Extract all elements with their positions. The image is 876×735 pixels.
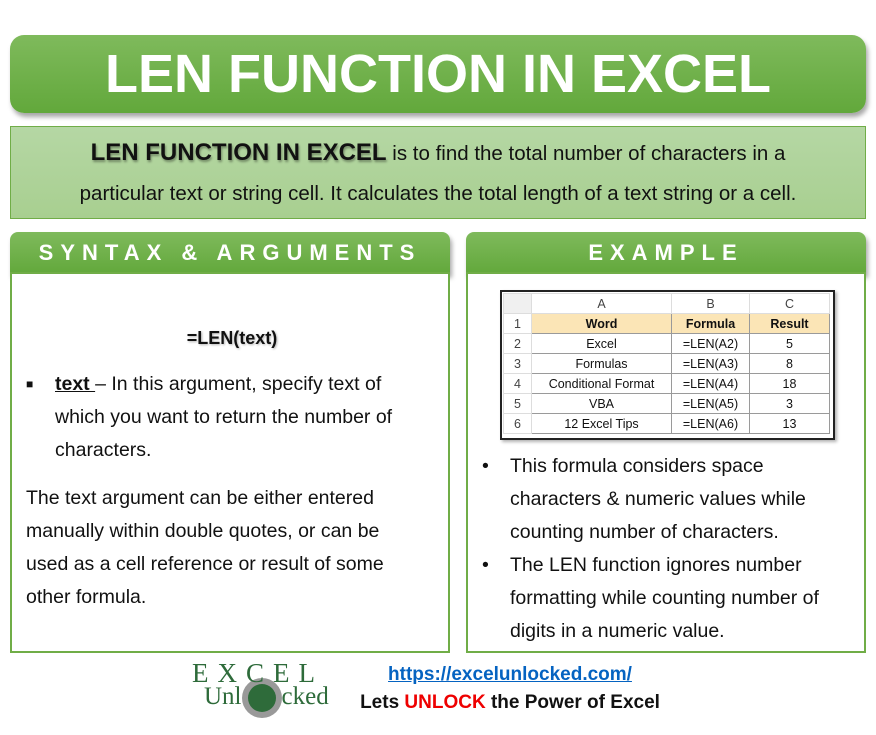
intro box: particular text or string cell. It calculates the total length of a text string or a cell. bbox=[80, 182, 796, 205]
excel table: Conditional Format bbox=[549, 376, 654, 390]
excel table: Result bbox=[770, 316, 809, 330]
excel table: 8 bbox=[786, 356, 793, 370]
excel table bbox=[500, 290, 835, 440]
excel table: =LEN(A3) bbox=[683, 356, 738, 370]
excel table: 5 bbox=[786, 336, 793, 350]
excel table: 5 bbox=[514, 396, 521, 410]
intro box bbox=[10, 126, 866, 219]
logo: EXCEL bbox=[192, 658, 324, 688]
excel table: Formula bbox=[686, 316, 735, 330]
excel table: VBA bbox=[589, 396, 614, 410]
header: example bbox=[466, 232, 866, 274]
excel table: 1 bbox=[514, 316, 521, 330]
syntax formula: =LEN(text) bbox=[187, 328, 277, 348]
excel table: 3 bbox=[514, 356, 521, 370]
excel table: 18 bbox=[783, 376, 796, 390]
excel table: 2 bbox=[514, 336, 521, 350]
excel table: 3 bbox=[786, 396, 793, 410]
excel table: =LEN(A4) bbox=[683, 376, 738, 390]
excel table: 6 bbox=[514, 416, 521, 430]
bullet: text argument: text – In this argument, specify text of which you want to return the number of characters. bbox=[55, 373, 392, 461]
excel table: A bbox=[597, 296, 606, 310]
header: syntax & arguments bbox=[10, 232, 450, 274]
excel table: Word bbox=[586, 316, 617, 330]
paragraph: The text argument can be either entered manually within double quotes, or can be used as a cell reference or result of some other formula. bbox=[26, 487, 384, 608]
excel table: 12 Excel Tips bbox=[564, 416, 639, 430]
title bbox=[10, 35, 866, 113]
logo: Unl cked bbox=[204, 683, 329, 710]
bullets bbox=[482, 455, 819, 642]
footer link: https://excelunlocked.com/ bbox=[388, 664, 632, 685]
excel table: 13 bbox=[783, 416, 796, 430]
panel: example bbox=[466, 272, 866, 653]
bullets: • bbox=[482, 554, 489, 576]
bullet: text argument: ■ bbox=[26, 377, 33, 391]
panel: syntax bbox=[10, 272, 450, 653]
tagline: Lets UNLOCK the Power of Excel bbox=[360, 692, 660, 713]
header: example: EXAMPLE bbox=[588, 240, 744, 265]
logo bbox=[192, 658, 329, 718]
bullets: • bbox=[482, 455, 489, 477]
excel table: =LEN(A5) bbox=[683, 396, 738, 410]
title: LEN FUNCTION IN EXCEL bbox=[105, 44, 771, 104]
excel table: =LEN(A6) bbox=[683, 416, 738, 430]
excel table: 4 bbox=[514, 376, 521, 390]
excel table: B bbox=[706, 296, 715, 310]
bullets: The LEN function ignores number formatting while counting number of digits in a numeric value. bbox=[510, 554, 819, 642]
excel table: =LEN(A2) bbox=[683, 336, 738, 350]
header: syntax & arguments: SYNTAX & ARGUMENTS bbox=[39, 240, 421, 265]
excel table: Formulas bbox=[575, 356, 628, 370]
excel table: C bbox=[785, 296, 794, 310]
intro box: LEN FUNCTION IN EXCEL is to find the total number of characters in a bbox=[91, 139, 785, 166]
bullets: This formula considers space characters & numeric values while counting number of characters. bbox=[510, 455, 806, 543]
excel table: Excel bbox=[586, 336, 617, 350]
